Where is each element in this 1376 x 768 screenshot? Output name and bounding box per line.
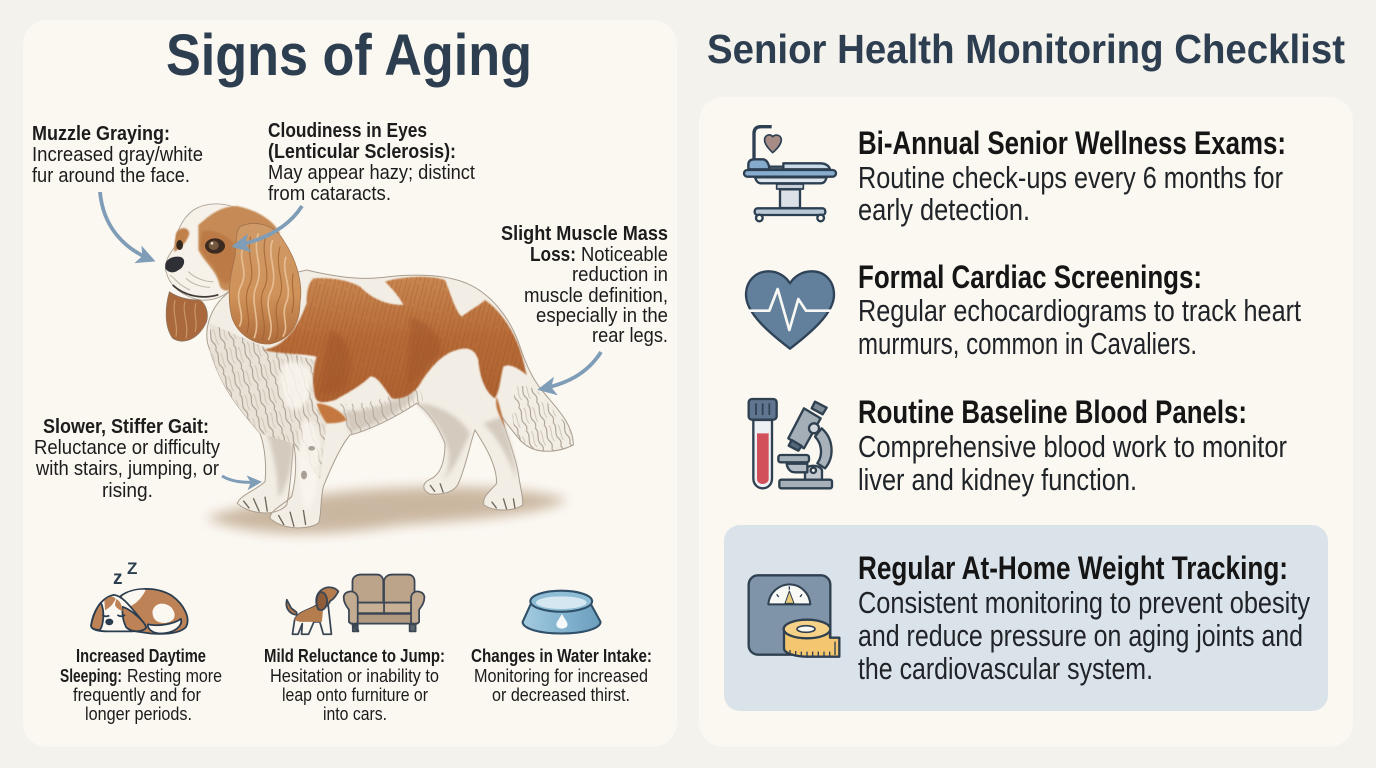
- dog figure: [165, 204, 573, 528]
- highlighted card: weight tracking: [724, 525, 1328, 711]
- icon: heart with pulse: [746, 271, 834, 349]
- caption: mild reluctance to jump: Hesitation or inability to: [270, 665, 439, 686]
- ear shadows: [246, 237, 294, 340]
- item: bi-annual exams: Bi-Annual Senior Wellness Exams:: [858, 125, 1286, 161]
- callout: muzzle graying: Increased gray/white: [32, 144, 203, 166]
- ear curls: [239, 233, 288, 340]
- item: weight tracking: the cardiovascular system.: [858, 651, 1153, 686]
- left ear curls: [174, 300, 196, 338]
- callout: muzzle graying: [32, 123, 203, 187]
- saddle markings: [263, 277, 527, 402]
- callout: slight muscle mass loss: rear legs.: [592, 325, 668, 347]
- caption: changes in water intake: [471, 645, 652, 705]
- dog: [286, 587, 338, 634]
- item: cardiac screenings: Formal Cardiac Screenings:: [858, 259, 1202, 295]
- left eye patch: [174, 228, 189, 252]
- panel: signs of aging: [23, 20, 677, 747]
- head brown marking: [198, 206, 280, 291]
- icon: blood tube and microscope: [749, 399, 832, 488]
- right ear: [229, 223, 301, 344]
- dog body: [207, 270, 573, 528]
- icon: dog and sofa: [286, 575, 424, 634]
- arrow: to rear legs: [541, 352, 601, 389]
- callout: slight muscle mass loss: Slight Muscle Mass: [501, 223, 668, 245]
- illustration: cavalier spaniel: [165, 204, 573, 534]
- item: blood panels: liver and kidney function.: [858, 462, 1137, 497]
- callout: slower stiffer gait: rising.: [102, 480, 153, 502]
- item: blood panels: Comprehensive blood work to monitor: [858, 429, 1287, 464]
- far leg and belly shading: [267, 390, 517, 498]
- item: cardiac screenings: [858, 259, 1301, 361]
- item: weight tracking: [858, 550, 1310, 686]
- callout: cloudiness in eyes: May appear hazy; distinct: [268, 162, 475, 184]
- icon: scale and measuring tape: [749, 575, 839, 657]
- paws: [243, 483, 515, 527]
- item: bi-annual exams: [858, 125, 1286, 227]
- panel: checklist: [699, 97, 1353, 747]
- icon: exam table: [744, 127, 836, 221]
- caption: changes in water intake: Changes in Water Intake:: [471, 645, 652, 666]
- left ear: [166, 292, 207, 341]
- heading: senior health monitoring checklist: Senior Health Monitoring Checklist: [707, 26, 1345, 72]
- caption: increased daytime sleeping: Resting more: [127, 665, 222, 686]
- caption: increased daytime sleeping: [60, 645, 222, 724]
- item: bi-annual exams: early detection.: [858, 192, 1030, 227]
- icon: sleeping dog: [91, 559, 188, 634]
- callout: cloudiness in eyes: Cloudiness in Eyes: [268, 120, 427, 142]
- callout: slight muscle mass loss: [501, 223, 668, 347]
- hind thigh marking: [496, 397, 505, 428]
- item: bi-annual exams: Routine check-ups every 6 months for: [858, 160, 1283, 195]
- nose: [165, 257, 184, 272]
- tail fur: [513, 386, 573, 451]
- caption: mild reluctance to jump: Mild Reluctance to Jump:: [264, 645, 445, 666]
- item: weight tracking: Regular At-Home Weight Tracking:: [858, 550, 1288, 586]
- head: [165, 204, 253, 300]
- title: signs of aging: Signs of Aging: [166, 23, 532, 88]
- callout: slight muscle mass loss: reduction in: [572, 264, 668, 286]
- eyes: [205, 238, 225, 254]
- callout: cloudiness in eyes: from cataracts.: [268, 183, 391, 205]
- chest highlight: [280, 362, 321, 510]
- item: blood panels: Routine Baseline Blood Panels:: [858, 394, 1247, 430]
- caption: increased daytime sleeping: Sleeping:: [60, 665, 122, 686]
- callout: muzzle graying: fur around the face.: [32, 165, 190, 187]
- arrow: to muzzle: [100, 192, 152, 260]
- caption: changes in water intake: or decreased thirst.: [492, 684, 630, 705]
- right panel background: [699, 97, 1353, 747]
- item: blood panels: [858, 394, 1287, 497]
- leg spots: [301, 446, 315, 479]
- callout: muzzle graying: Muzzle Graying:: [32, 123, 170, 145]
- caption: mild reluctance to jump: [264, 645, 445, 724]
- callout: slower stiffer gait: with stairs, jumping, or: [35, 458, 219, 480]
- callout: slower stiffer gait: Reluctance or difficulty: [34, 437, 220, 459]
- saddle fur streaks: [263, 277, 527, 402]
- mouth: [173, 285, 218, 297]
- icon: sleeping dog: Z: [127, 559, 137, 578]
- caption: increased daytime sleeping: longer periods.: [85, 703, 192, 724]
- callout: cloudiness in eyes: [268, 120, 475, 205]
- muzzle shading: [170, 272, 213, 290]
- callout: slight muscle mass loss: especially in the: [536, 305, 668, 327]
- callout: slower stiffer gait: Slower, Stiffer Gait:: [43, 416, 209, 438]
- caption: increased daytime sleeping: Increased Daytime: [76, 645, 206, 666]
- shoulder marking: [317, 403, 347, 423]
- callout: slight muscle mass loss: muscle definition,: [524, 285, 668, 307]
- sofa: [344, 575, 424, 631]
- arrow: to eye: [235, 206, 302, 246]
- callout: slower stiffer gait: [34, 416, 220, 502]
- saddle dark centre: [320, 317, 440, 393]
- belly fringe fur: [337, 387, 423, 435]
- icon: water bowl: [523, 591, 601, 634]
- caption: mild reluctance to jump: into cars.: [323, 703, 387, 724]
- chest mane fur: [210, 323, 327, 480]
- ground shadow: [205, 487, 568, 534]
- caption: changes in water intake: Monitoring for increased: [474, 665, 648, 686]
- arrow: to front leg: [222, 476, 259, 482]
- cheek colour: [200, 231, 237, 283]
- callout: slight muscle mass loss: Noticeable: [581, 244, 668, 266]
- callout: slight muscle mass loss: Loss:: [530, 244, 576, 266]
- icon: sleeping dog: z: [113, 568, 122, 589]
- item: cardiac screenings: murmurs, common in Cavaliers.: [858, 326, 1197, 361]
- caption: mild reluctance to jump: leap onto furniture or: [282, 684, 428, 705]
- card background: [724, 525, 1328, 711]
- left panel background: [23, 20, 677, 747]
- caption: increased daytime sleeping: frequently and for: [73, 684, 201, 705]
- callout: cloudiness in eyes: (Lenticular Sclerosis):: [268, 141, 456, 163]
